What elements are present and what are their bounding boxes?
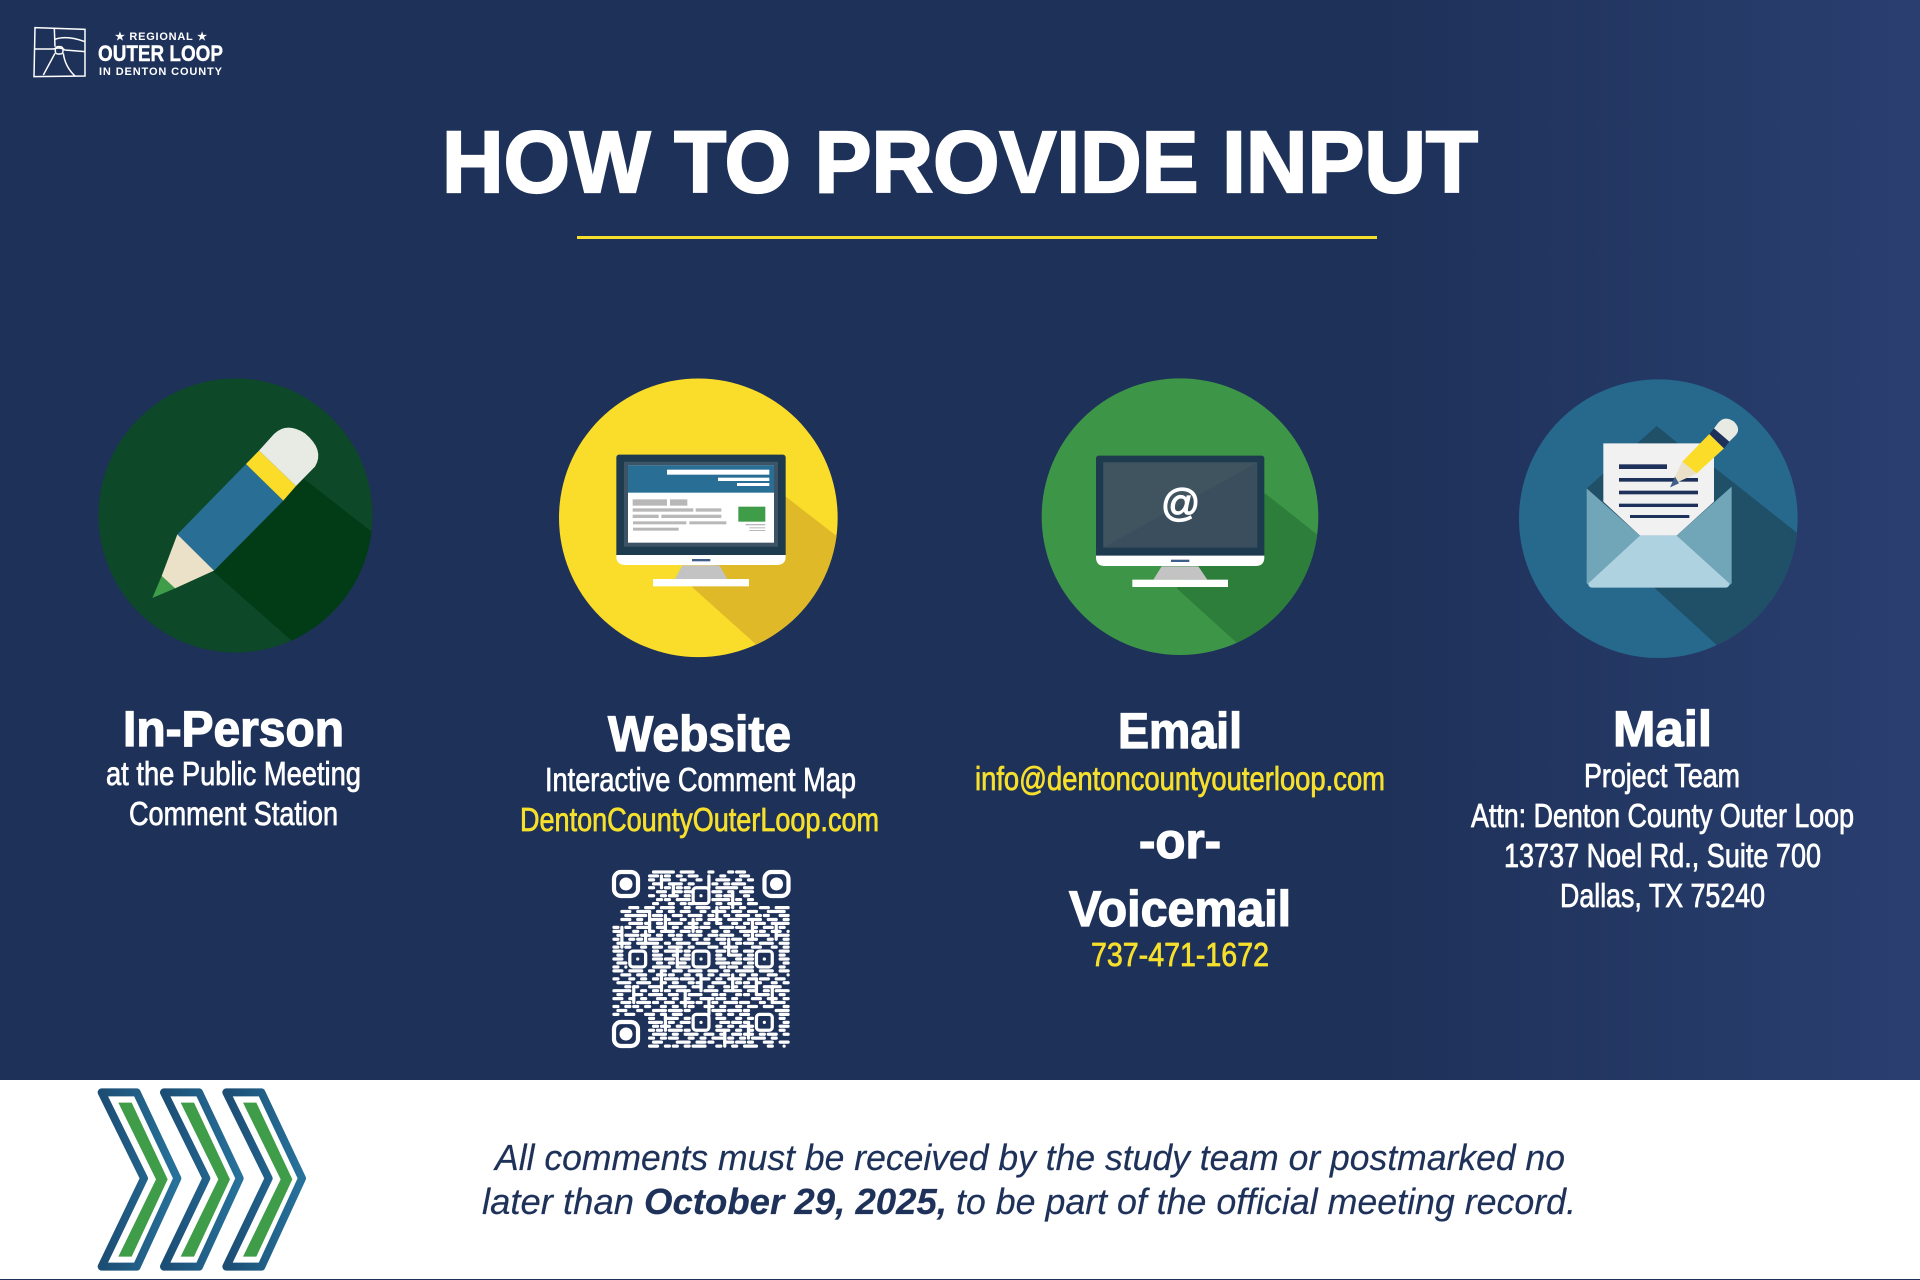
text: or: -or-: [1139, 813, 1221, 869]
text: mailing address: 13737 Noel Rd., Suite 700: [1504, 837, 1821, 874]
panel: in-person: [98, 378, 387, 832]
icon: monitor with at sign: [1042, 378, 1337, 657]
text: deadline notice: October 29, 2025,: [644, 1181, 947, 1222]
QR modules: [614, 872, 788, 1046]
logo text: ★ REGIONAL ★: [115, 31, 207, 43]
heading: Email: Email: [1118, 703, 1242, 759]
text: phone number: 737-471-1672: [1091, 936, 1269, 973]
icon: chevrons: [102, 1092, 302, 1267]
icon: pencil: [98, 378, 387, 652]
text: location: at the Public Meeting: [106, 755, 361, 792]
text: mailing address: [1471, 757, 1854, 914]
text: deadline notice: All comments must be received by the study team or postmarked no: [493, 1137, 1565, 1178]
text: deadline notice: later than: [482, 1181, 634, 1222]
footer background: [0, 1080, 1920, 1279]
panel: footer: [0, 1080, 1920, 1279]
text: interactive comment map: [520, 761, 879, 838]
heading: Website: Website: [608, 706, 791, 762]
title: HOW TO PROVIDE INPUT: [442, 114, 1478, 211]
panel: website: [520, 378, 879, 1046]
text: deadline notice: [482, 1137, 1576, 1222]
logo text: [98, 31, 223, 78]
heading: In-Person: In-Person: [123, 701, 344, 757]
text: interactive comment map: DentonCountyOuterLoop.com: [520, 801, 879, 838]
text: location: [106, 755, 361, 832]
panel: email and voicemail: [975, 378, 1385, 973]
heading: Mail: Mail: [1613, 701, 1712, 757]
logo: Regional Outer Loop in Denton County: [34, 28, 223, 78]
heading: Voicemail: Voicemail: [1069, 881, 1291, 937]
bottom border: [0, 1279, 1920, 1280]
text: mailing address: Dallas, TX 75240: [1560, 877, 1765, 914]
text: email address: info@dentoncountyouterloop.com: [975, 760, 1385, 797]
icon: monitor with web page: [559, 378, 857, 658]
title underline: [577, 236, 1377, 239]
logo text: IN DENTON COUNTY: [99, 66, 223, 78]
text: mailing address: Project Team: [1584, 757, 1740, 794]
icon: envelope with letter and pencil: [1519, 379, 1817, 658]
text: location: Comment Station: [129, 795, 338, 832]
logo text: OUTER LOOP: [98, 41, 223, 66]
logo map mark: [34, 28, 85, 77]
QR code: [614, 872, 788, 1046]
panel: mail: [1471, 379, 1854, 914]
text: interactive comment map: Interactive Comment Map: [545, 761, 856, 798]
QR finder patterns: [614, 872, 788, 1046]
text: deadline notice: to be part of the official meeting record.: [956, 1181, 1576, 1222]
icon: monitor with at sign: @: [1161, 483, 1200, 526]
